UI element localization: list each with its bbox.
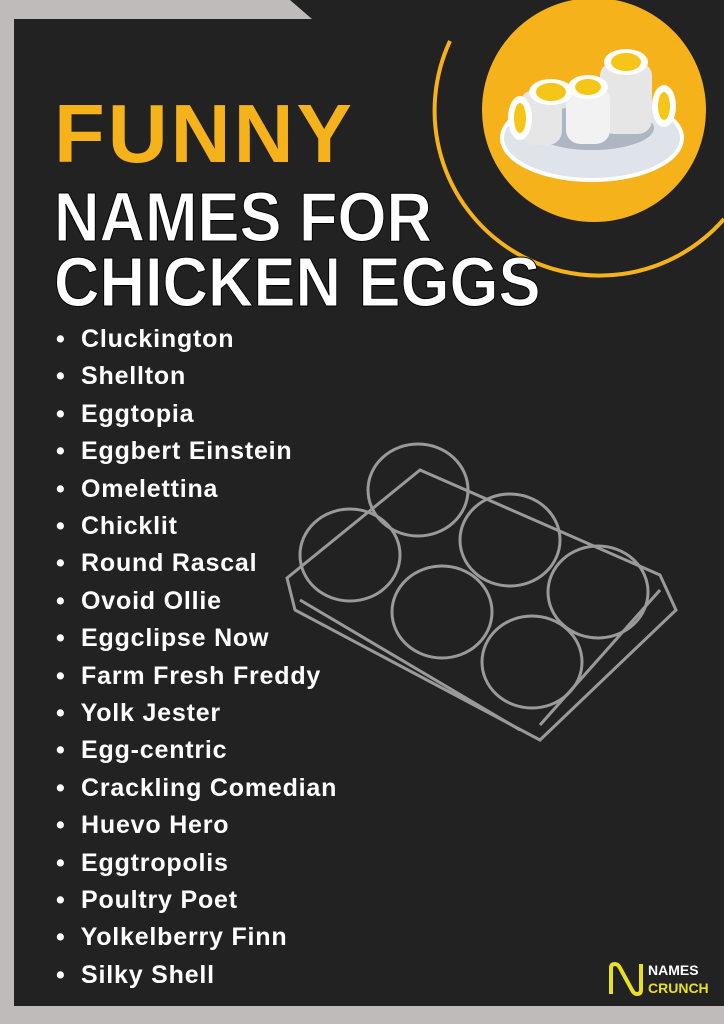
illustration: egg carton [287,444,676,740]
list of names: • Crackling Comedian [56,774,337,802]
list of names: • Round Rascal [56,549,257,577]
title: FUNNY [54,87,355,180]
list of names: • Yolkelberry Finn [56,923,287,951]
list of names: • Silky Shell [56,961,215,989]
list of names: • Eggtropolis [56,849,229,877]
list of names: • Egg-centric [56,736,227,764]
decorative ring arc [435,41,724,276]
icon: yellow circle with eggs [482,0,706,222]
list of names [56,325,337,989]
list of names: • Eggclipse Now [56,624,269,652]
list of names: • Cluckington [56,325,234,353]
list of names: • Eggbert Einstein [56,437,292,465]
list of names: • Huevo Hero [56,811,229,839]
list of names: • Poultry Poet [56,886,238,914]
list of names: • Omelettina [56,475,218,503]
list of names: • Ovoid Ollie [56,587,222,615]
title: CHICKEN EGGS [54,243,541,321]
list of names: • Shellton [56,362,186,390]
list of names: • Farm Fresh Freddy [56,662,321,690]
title: NAMES FOR [54,178,432,256]
logo [609,962,709,996]
list of names: • Yolk Jester [56,699,221,727]
title [54,87,541,321]
list of names: • Eggtopia [56,400,194,428]
logo: CRUNCH [648,980,709,996]
logo: NAMES [648,962,699,978]
list of names: • Chicklit [56,512,178,540]
